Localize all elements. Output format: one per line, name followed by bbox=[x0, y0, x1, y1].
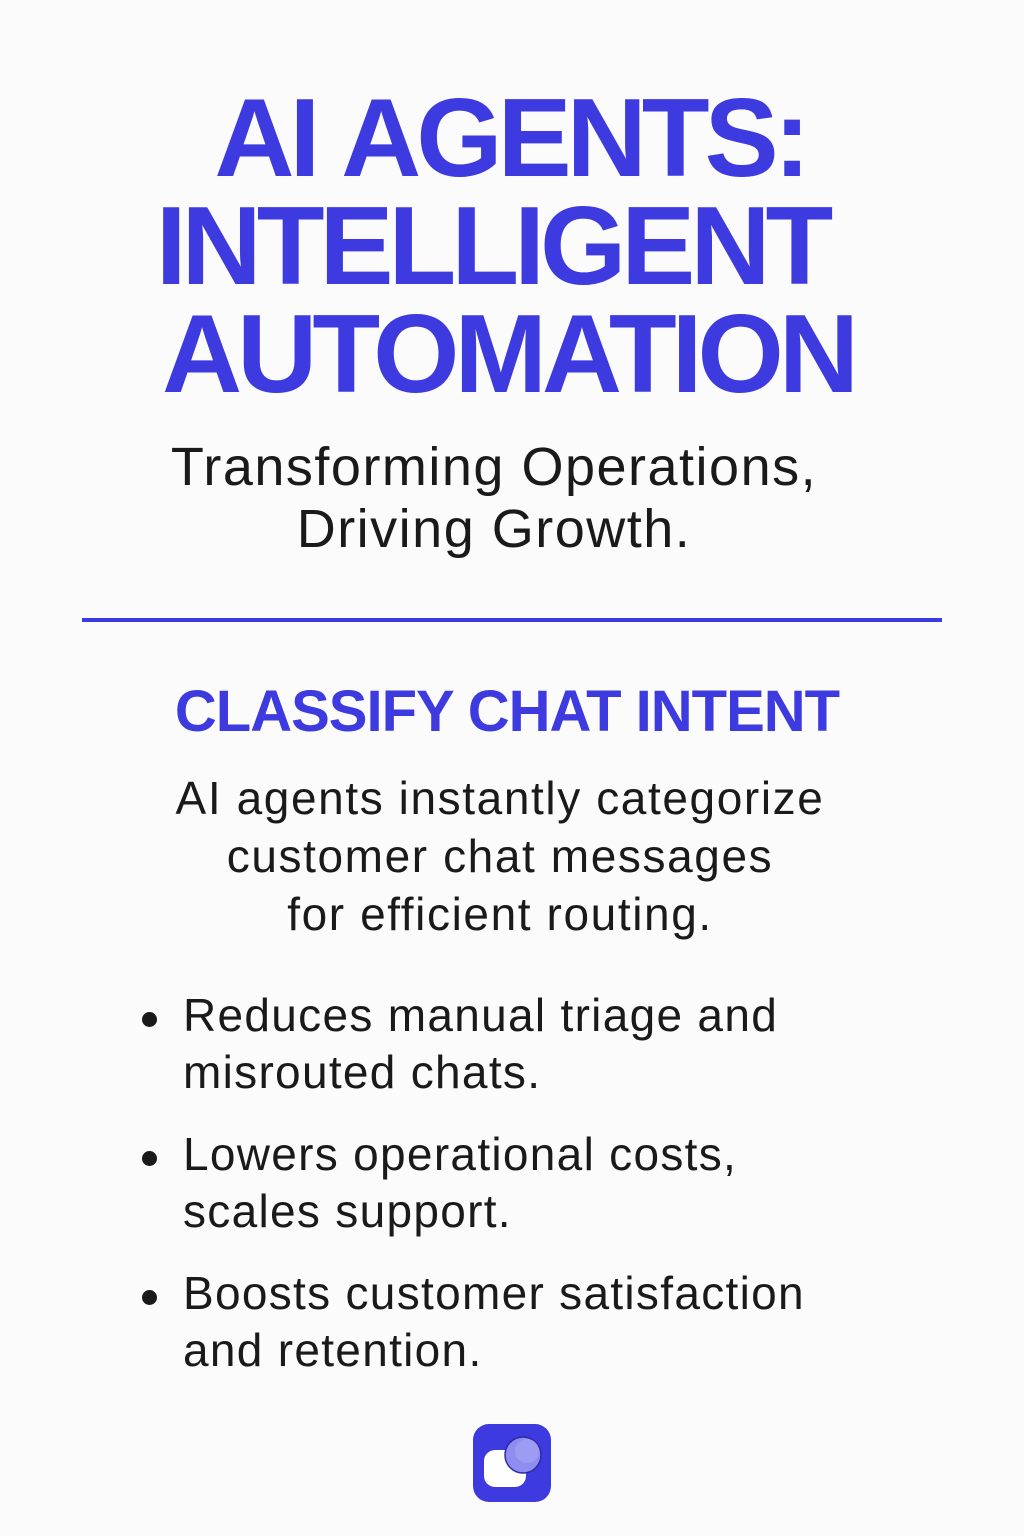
bullet 2 bbox=[142, 1128, 737, 1237]
description paragraph bbox=[176, 772, 824, 940]
icon: logo bbox=[473, 1424, 551, 1502]
section heading: CLASSIFY CHAT INTENT bbox=[175, 679, 839, 744]
bullet 3 bbox=[142, 1267, 805, 1376]
subtitle: Transforming Operations, bbox=[171, 437, 817, 497]
title bbox=[156, 76, 854, 416]
subtitle: Driving Growth. bbox=[297, 499, 691, 559]
description paragraph: for efficient routing. bbox=[287, 888, 713, 940]
title: AI AGENTS: bbox=[214, 76, 806, 200]
title: INTELLIGENT bbox=[156, 184, 828, 308]
bullet 2: scales support. bbox=[183, 1185, 512, 1237]
bullet 3: and retention. bbox=[183, 1324, 483, 1376]
description paragraph: customer chat messages bbox=[227, 830, 773, 882]
subtitle bbox=[171, 437, 817, 559]
bullet 1 bbox=[142, 989, 778, 1098]
title: AUTOMATION bbox=[162, 292, 854, 416]
bullet 2: Lowers operational costs, bbox=[183, 1128, 737, 1180]
bullet 1: misrouted chats. bbox=[183, 1046, 541, 1098]
description paragraph: AI agents instantly categorize bbox=[176, 772, 824, 824]
bullet 3: Boosts customer satisfaction bbox=[183, 1267, 805, 1319]
bullet 1: Reduces manual triage and bbox=[183, 989, 778, 1041]
